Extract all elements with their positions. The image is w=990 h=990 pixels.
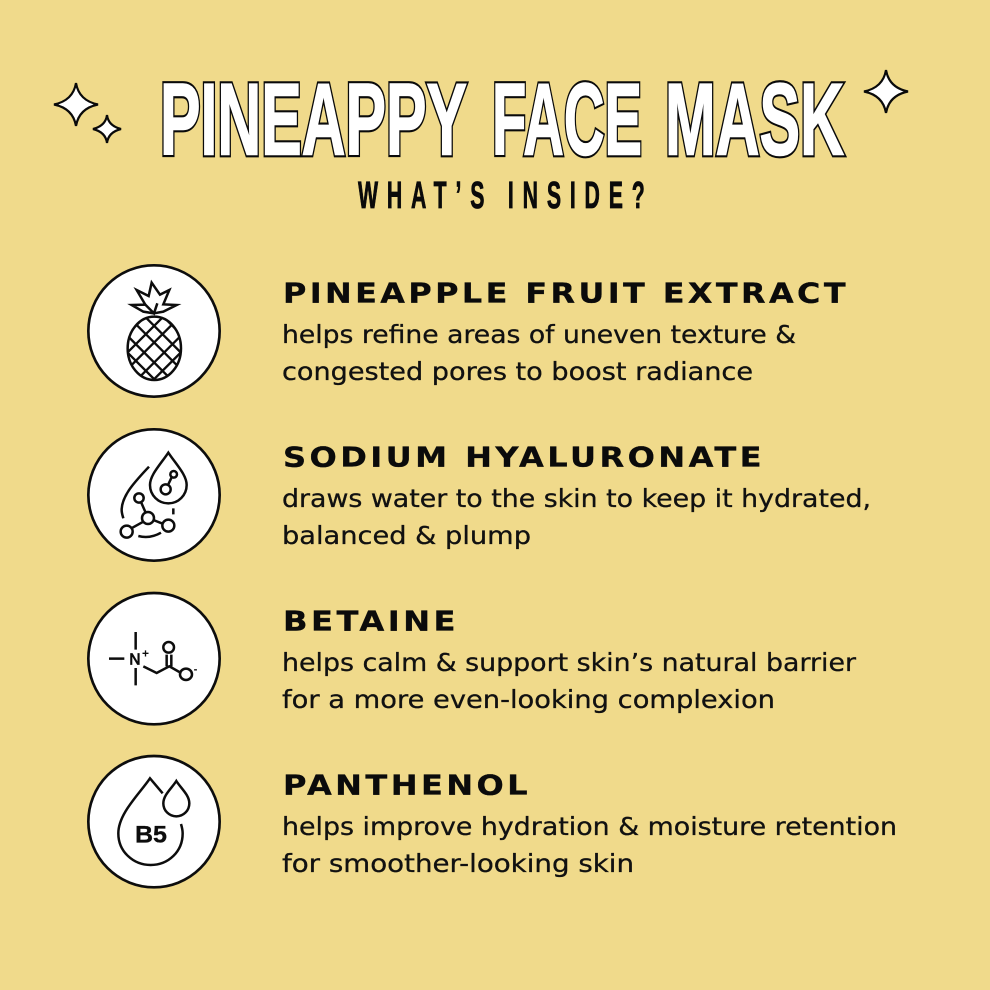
description [282, 812, 897, 878]
icon: B5 drops [88, 756, 220, 887]
icon: betaine molecule: + [142, 646, 149, 660]
description: congested pores to boost radiance [282, 357, 753, 386]
icon: B5 drops: B5 [135, 821, 167, 848]
row: pineapple fruit extract [88, 265, 849, 397]
description [282, 648, 857, 714]
icon: hyaluronate drops [88, 429, 220, 561]
subtitle: WHAT’S INSIDE? [358, 173, 645, 217]
icon: betaine molecule: - [194, 664, 198, 676]
description [282, 484, 871, 550]
title: FACE [492, 62, 642, 176]
description: for smoother-looking skin [282, 849, 634, 878]
icon: small sparkle left [93, 115, 121, 143]
ingredient name: SODIUM HYALURONATE [283, 440, 765, 474]
title: FACE [492, 62, 642, 176]
row: betaine [88, 593, 857, 724]
ingredient name: PINEAPPLE FRUIT EXTRACT [283, 276, 849, 310]
icon: sparkle right [864, 70, 908, 113]
title: MASK [665, 62, 844, 176]
ingredient name: BETAINE [283, 604, 459, 638]
ingredient name: PANTHENOL [283, 768, 531, 802]
row: sodium hyaluronate [88, 429, 871, 561]
description [282, 320, 796, 386]
description: helps refine areas of uneven texture & [282, 320, 796, 349]
row: panthenol [88, 756, 897, 887]
description: balanced & plump [282, 521, 531, 550]
icon: betaine molecule: N [129, 651, 140, 668]
title: PINEAPPY [160, 62, 467, 176]
icon: betaine molecule [88, 593, 220, 724]
description: helps calm & support skin’s natural barrier [282, 648, 857, 677]
description: helps improve hydration & moisture retention [282, 812, 897, 841]
title: PINEAPPY [160, 62, 467, 176]
description: draws water to the skin to keep it hydrated, [282, 484, 871, 513]
icon: large sparkle left [54, 83, 98, 126]
title: MASK [665, 62, 844, 176]
icon: pineapple [88, 265, 220, 397]
description: for a more even-looking complexion [282, 685, 775, 714]
